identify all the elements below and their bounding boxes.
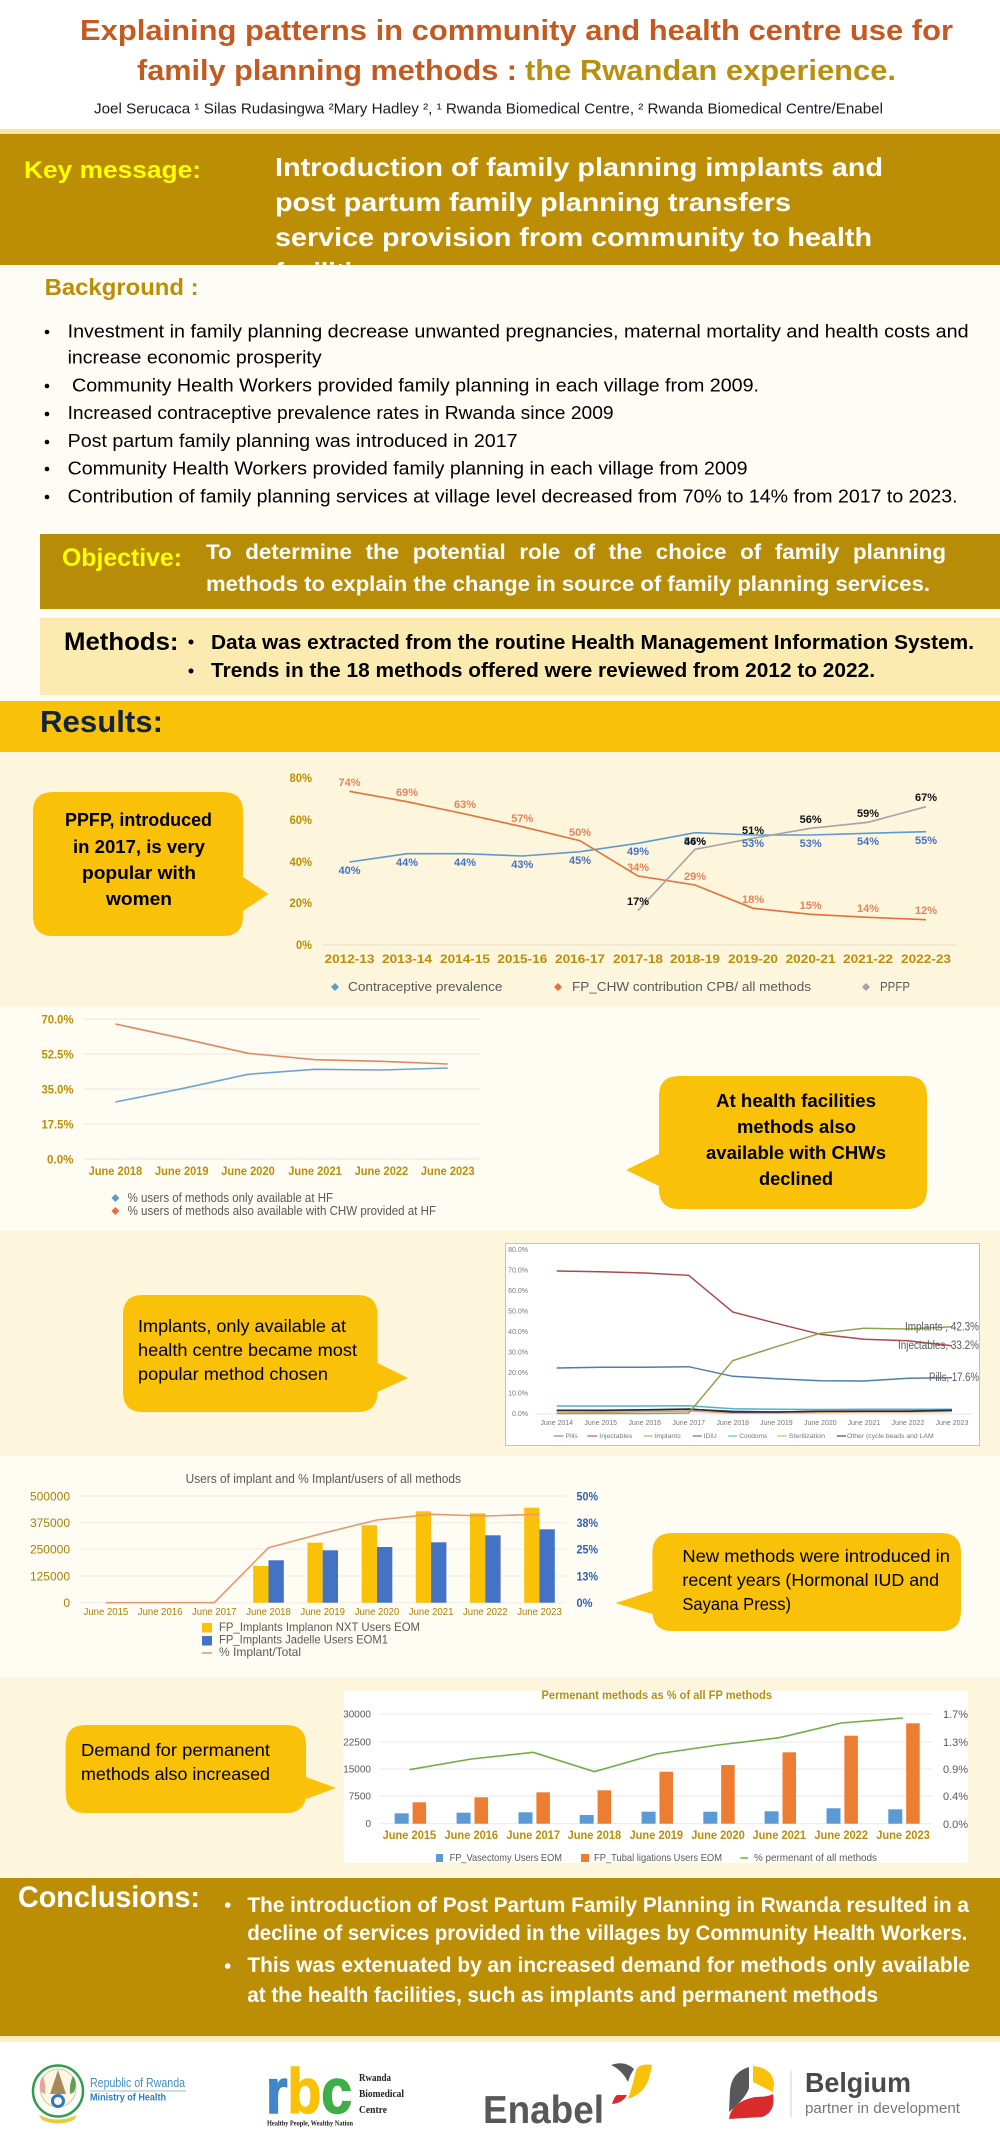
chart legend: % Implant/Total [219, 1645, 301, 1659]
line chart: contraceptive prevalence, CHW contribution and PPFP: 20% [290, 896, 312, 910]
combo chart: users of implants: Users of implant and % Implant/users of all methods [186, 1471, 461, 1486]
background bullet list: Post partum family planning was introduced in 2017 [68, 430, 518, 451]
callout: permanent methods: Demand for permanent [81, 1740, 270, 1760]
methods bullet list [188, 631, 974, 682]
line chart: method mix: 10.0% [508, 1390, 528, 1398]
chart legend: Contraceptive prevalence [348, 979, 502, 994]
line chart: method mix: June 2019 [760, 1420, 793, 1427]
logo: Belgium partner in development: Belgium [805, 2067, 911, 2098]
background bullet list: Increased contraceptive prevalence rates in Rwanda since 2009 [68, 402, 614, 423]
logo: Rwanda Biomedical Centre: Rwanda [359, 2073, 392, 2084]
line chart: contraceptive prevalence, CHW contribution and PPFP: 53% [800, 838, 822, 850]
background bullet list [45, 320, 969, 506]
combo chart: users of implants: 125000 [30, 1570, 70, 1584]
callout: new methods: New methods were introduced in [682, 1546, 950, 1566]
combo chart: permanent methods: Permenant methods as % of all FP methods [542, 1690, 772, 1702]
callout: PPFP popular [33, 792, 268, 936]
chart legend: Injectables [599, 1433, 633, 1440]
line chart: users of methods at health facilities: June 2020 [221, 1164, 275, 1178]
line chart: contraceptive prevalence, CHW contribution and PPFP [290, 771, 957, 994]
logo: Rwanda Biomedical Centre: rbc [266, 2057, 352, 2127]
background bullet list: Investment in family planning decrease unwanted pregnancies, maternal mortality and health costs and [68, 320, 969, 342]
line chart: contraceptive prevalence, CHW contribution and PPFP: 67% [915, 792, 937, 804]
line chart: users of methods at health facilities [42, 1012, 480, 1218]
chart legend: PPFP [880, 979, 910, 994]
line chart: method mix: 80.0% [508, 1247, 528, 1254]
combo chart: users of implants: June 2018 [246, 1606, 291, 1618]
line chart: contraceptive prevalence, CHW contribution and PPFP: 44% [454, 857, 476, 869]
line chart: contraceptive prevalence, CHW contribution and PPFP: 51% [742, 825, 764, 837]
combo chart: permanent methods: 0.9% [943, 1764, 968, 1776]
callout: implants popular: Implants, only available at [138, 1316, 346, 1336]
line chart: contraceptive prevalence, CHW contribution and PPFP: 34% [627, 862, 649, 874]
combo chart: users of implants: 500000 [30, 1490, 70, 1504]
line chart: contraceptive prevalence, CHW contribution and PPFP: 2012-13 [324, 952, 375, 966]
combo chart: users of implants: 38% [576, 1518, 598, 1530]
objective text [206, 541, 946, 596]
line chart: method mix [506, 1244, 980, 1446]
combo chart: permanent methods: 30000 [343, 1710, 371, 1720]
line chart: users of methods at health facilities: June 2022 [355, 1164, 408, 1178]
combo chart: permanent methods: 0.0% [943, 1819, 968, 1831]
background bullet list: Community Health Workers provided family planning in each village from 2009. [72, 374, 759, 395]
chart legend: % permenant of all methods [754, 1852, 877, 1864]
line chart: users of methods at health facilities: June 2019 [155, 1164, 209, 1178]
combo chart: users of implants: June 2020 [355, 1606, 399, 1618]
line chart: users of methods at health facilities: June 2021 [288, 1164, 342, 1178]
line chart: contraceptive prevalence, CHW contribution and PPFP: 63% [454, 799, 476, 811]
panel: methods [40, 618, 1000, 695]
chart legend [111, 1191, 436, 1218]
line chart: method mix: Implants , 42.3% [905, 1322, 979, 1334]
key message text: post partum family planning transfers [275, 187, 791, 217]
line chart: contraceptive prevalence, CHW contribution and PPFP: 54% [857, 836, 879, 848]
methods bullet list: Trends in the 18 methods offered were reviewed from 2012 to 2022. [211, 659, 875, 682]
callout: implants popular [123, 1295, 408, 1412]
title: Explaining patterns in community and health centre use for [80, 15, 953, 47]
logo: Republic of Rwanda Ministry of Health [33, 2066, 186, 2124]
objective text: methods to explain the change in source of family planning services. [206, 573, 930, 596]
callout: implants popular: popular method chosen [138, 1364, 328, 1384]
combo chart: permanent methods: June 2020 [691, 1828, 745, 1842]
combo chart: users of implants: 250000 [30, 1542, 70, 1556]
combo chart: permanent methods [343, 1690, 968, 1864]
callout: PPFP popular: women [105, 889, 172, 909]
chart legend: IDIU [704, 1433, 717, 1440]
chart legend [202, 1620, 420, 1659]
line chart: method mix: June 2015 [584, 1420, 617, 1427]
combo chart: permanent methods: June 2023 [876, 1828, 930, 1842]
chart legend: Other (cycle beads and LAM [847, 1433, 934, 1440]
callout: PPFP popular: PPFP, introduced [65, 810, 212, 830]
line chart: contraceptive prevalence, CHW contribution and PPFP: 80% [290, 771, 312, 785]
combo chart: permanent methods: 7500 [349, 1792, 371, 1802]
line chart: method mix: 20.0% [508, 1370, 528, 1377]
line chart: users of methods at health facilities: 52.5% [42, 1048, 74, 1062]
logo: Enabel [483, 2063, 652, 2132]
panel: health facility methods [0, 1007, 1000, 1231]
conclusions bullet list: The introduction of Post Partum Family Planning in Rwanda resulted in a [247, 1894, 969, 1917]
callout: new methods [615, 1533, 961, 1631]
combo chart: users of implants: 25% [576, 1544, 598, 1556]
panel: objective [40, 534, 1000, 609]
line chart: contraceptive prevalence, CHW contribution and PPFP: 18% [742, 894, 764, 906]
results heading band [0, 701, 1000, 752]
line chart: contraceptive prevalence, CHW contribution and PPFP: 2017-18 [613, 952, 663, 966]
chart legend: % users of methods only available at HF [128, 1191, 333, 1205]
line chart: method mix: 30.0% [508, 1350, 528, 1356]
line chart: users of methods at health facilities: 17.5% [42, 1118, 74, 1132]
line chart: contraceptive prevalence, CHW contribution and PPFP: 2019-20 [728, 952, 778, 966]
line chart: method mix: June 2023 [936, 1420, 968, 1427]
key message label: Key message: [24, 157, 201, 184]
objective label: Objective: [62, 544, 182, 572]
panel: new methods [0, 1456, 1000, 1677]
combo chart: permanent methods: 15000 [343, 1764, 371, 1776]
line chart: method mix: June 2022 [892, 1420, 924, 1427]
chart legend: Condoms [739, 1433, 768, 1440]
line chart: contraceptive prevalence, CHW contribution and PPFP: 53% [742, 838, 764, 850]
line chart: method mix: June 2020 [804, 1420, 837, 1427]
combo chart: users of implants: 0 [63, 1596, 70, 1610]
line chart: method mix: Pills, 17.6% [929, 1372, 979, 1384]
combo chart: permanent methods: June 2017 [506, 1828, 560, 1842]
logo: Belgium partner in development: partner in development [805, 2100, 961, 2117]
methods label: Methods: [64, 628, 178, 656]
chart legend: FP_Tubal ligations Users EOM [594, 1852, 722, 1864]
background bullet list: Community Health Workers provided family planning in each village from 2009 [68, 458, 748, 479]
combo chart: users of implants: June 2022 [463, 1606, 508, 1618]
line chart: contraceptive prevalence, CHW contribution and PPFP: 2021-22 [843, 952, 893, 966]
callout: methods declined: available with CHWs [706, 1143, 886, 1163]
line chart: contraceptive prevalence, CHW contribution and PPFP: 0% [296, 938, 312, 952]
line chart: method mix: 0.0% [512, 1411, 528, 1418]
combo chart: permanent methods: June 2018 [568, 1828, 621, 1842]
line chart: method mix: June 2018 [716, 1420, 749, 1427]
combo chart: permanent methods: June 2021 [752, 1828, 806, 1842]
conclusions bullet list: at the health facilities, such as implants and permanent methods [247, 1984, 878, 2007]
line chart: method mix: 50.0% [508, 1308, 528, 1316]
line chart: contraceptive prevalence, CHW contribution and PPFP: 59% [857, 808, 879, 820]
line chart: users of methods at health facilities: 0.0% [47, 1152, 74, 1166]
panel: conclusions [0, 1878, 1000, 2042]
line chart: method mix: June 2021 [848, 1420, 880, 1427]
combo chart: permanent methods: June 2016 [444, 1828, 498, 1842]
conclusions bullet list: This was extenuated by an increased demand for methods only available [247, 1954, 970, 1977]
combo chart: permanent methods: 0 [365, 1819, 371, 1830]
line chart: method mix: June 2014 [540, 1420, 573, 1427]
background heading: Background : [45, 274, 199, 300]
line chart: contraceptive prevalence, CHW contribution and PPFP: 69% [396, 787, 418, 799]
line chart: contraceptive prevalence, CHW contribution and PPFP: 2015-16 [497, 952, 548, 966]
key message text: service provision from community to health [275, 222, 872, 252]
line chart: contraceptive prevalence, CHW contribution and PPFP: 56% [800, 814, 822, 826]
line chart: contraceptive prevalence, CHW contribution and PPFP: 50% [569, 827, 591, 839]
combo chart: users of implants: 13% [576, 1572, 598, 1584]
panel: background [0, 265, 1000, 701]
conclusions heading: Conclusions: [18, 1881, 200, 1914]
authors: Joel Serucaca ¹ Silas Rudasingwa ²Mary Hadley ², ¹ Rwanda Biomedical Centre, ² Rwanda Biomedical Centre/Enabel [94, 102, 883, 118]
key message text: facilities. [275, 257, 389, 287]
line chart: contraceptive prevalence, CHW contribution and PPFP: 29% [684, 871, 706, 883]
chart legend: FP_Implants Implanon NXT Users EOM [219, 1620, 420, 1634]
chart legend: FP_Implants Jadelle Users EOM1 [219, 1632, 388, 1646]
callout: PPFP popular: popular with [82, 863, 196, 883]
panel: implants [0, 1231, 1000, 1456]
panel: PPFP result [0, 752, 1000, 1007]
line chart: users of methods at health facilities: 35.0% [42, 1082, 74, 1096]
logo: Rwanda Biomedical Centre: Healthy People, Wealthy Nation [267, 2120, 353, 2128]
line chart: contraceptive prevalence, CHW contribution and PPFP: 2020-21 [786, 952, 836, 966]
callout: permanent methods [66, 1725, 336, 1813]
combo chart: permanent methods: 1.3% [943, 1737, 968, 1749]
combo chart: users of implants: June 2015 [84, 1606, 128, 1618]
combo chart: users of implants: June 2019 [300, 1606, 345, 1618]
logo: Enabel: Enabel [483, 2089, 604, 2132]
combo chart: users of implants: 50% [576, 1492, 598, 1504]
chart legend: FP_CHW contribution CPB/ all methods [572, 979, 812, 994]
callout: PPFP popular: in 2017, is very [73, 837, 205, 857]
background bullet list: increase economic prosperity [68, 347, 322, 368]
line chart: method mix: 60.0% [508, 1288, 528, 1295]
line chart: contraceptive prevalence, CHW contribution and PPFP: 49% [627, 846, 649, 858]
conclusions bullet list [225, 1894, 970, 2007]
line chart: contraceptive prevalence, CHW contribution and PPFP: 12% [915, 905, 937, 917]
line chart: contraceptive prevalence, CHW contribution and PPFP: 60% [290, 813, 312, 827]
callout: methods declined: At health facilities [716, 1091, 876, 1111]
line chart: contraceptive prevalence, CHW contribution and PPFP: 17% [627, 896, 649, 908]
line chart: contraceptive prevalence, CHW contribution and PPFP: 45% [569, 855, 591, 867]
line chart: contraceptive prevalence, CHW contribution and PPFP: 43% [511, 859, 534, 871]
key message text: Introduction of family planning implants and [275, 152, 883, 182]
combo chart: users of implants: June 2017 [192, 1606, 237, 1618]
line chart: contraceptive prevalence, CHW contribution and PPFP: 57% [511, 813, 534, 825]
chart legend: Sterilization [789, 1433, 825, 1440]
line chart: contraceptive prevalence, CHW contribution and PPFP: 46% [684, 836, 706, 848]
combo chart: permanent methods: June 2022 [814, 1828, 868, 1842]
callout: new methods: Sayana Press) [682, 1594, 791, 1614]
title [80, 15, 953, 87]
line chart: contraceptive prevalence, CHW contribution and PPFP: 74% [338, 777, 361, 789]
callout: new methods: recent years (Hormonal IUD and [682, 1570, 939, 1590]
background bullet list: Contribution of family planning services at village level decreased from 70% to 14% from 2017 to 2023. [68, 486, 958, 506]
callout: methods declined: methods also [737, 1117, 856, 1137]
line chart: contraceptive prevalence, CHW contribution and PPFP: 2016-17 [555, 952, 605, 966]
combo chart: permanent methods: 1.7% [943, 1709, 968, 1721]
line chart: contraceptive prevalence, CHW contribution and PPFP: 54% [684, 836, 706, 848]
line chart: method mix: 70.0% [508, 1268, 528, 1274]
logo: Rwanda Biomedical Centre [266, 2057, 404, 2128]
chart legend: FP_Vasectomy Users EOM [450, 1852, 562, 1864]
combo chart: users of implants: June 2021 [409, 1606, 454, 1618]
chart legend [554, 1433, 934, 1440]
logo: Belgium partner in development [729, 2066, 961, 2119]
panel: key message [0, 129, 1000, 287]
methods bullet list: Data was extracted from the routine Health Management Information System. [211, 631, 974, 654]
line chart: users of methods at health facilities: June 2018 [89, 1164, 142, 1178]
line chart: contraceptive prevalence, CHW contribution and PPFP: 2014-15 [440, 952, 490, 966]
line chart: contraceptive prevalence, CHW contribution and PPFP: 15% [800, 900, 822, 912]
chart legend [331, 979, 910, 994]
callout: methods declined [626, 1076, 927, 1209]
panel: permanent methods [0, 1677, 1000, 1878]
combo chart: permanent methods: 22500 [343, 1738, 371, 1748]
results heading band: Results: [40, 704, 163, 739]
title: family planning methods : [137, 55, 517, 87]
chart legend: Implants [654, 1433, 681, 1440]
combo chart: users of implants: June 2023 [517, 1606, 562, 1618]
combo chart: permanent methods: June 2015 [383, 1828, 436, 1842]
combo chart: users of implants: 0% [576, 1598, 592, 1610]
chart legend [436, 1852, 877, 1864]
line chart: contraceptive prevalence, CHW contribution and PPFP: 40% [338, 865, 361, 877]
title: the Rwandan experience. [525, 55, 896, 87]
chart legend: % users of methods also available with CHW provided at HF [128, 1204, 436, 1218]
combo chart: permanent methods: June 2019 [630, 1828, 683, 1842]
line chart: contraceptive prevalence, CHW contribution and PPFP: 55% [915, 835, 937, 847]
key message text [275, 152, 883, 287]
callout: permanent methods: methods also increased [81, 1764, 270, 1784]
combo chart: permanent methods: 0.4% [943, 1791, 968, 1803]
line chart: method mix: June 2017 [672, 1420, 705, 1427]
logo: Rwanda Biomedical Centre: Biomedical [359, 2089, 404, 2100]
line chart: contraceptive prevalence, CHW contribution and PPFP: 14% [857, 903, 879, 915]
line chart: contraceptive prevalence, CHW contribution and PPFP: 2013-14 [382, 952, 432, 966]
line chart: users of methods at health facilities: June 2023 [421, 1164, 475, 1178]
conclusions bullet list: decline of services provided in the villages by Community Health Workers. [247, 1922, 967, 1945]
line chart: method mix: 40.0% [508, 1329, 528, 1336]
combo chart: users of implants: 375000 [30, 1516, 70, 1530]
logo: Republic of Rwanda Ministry of Health: Ministry of Health [90, 2092, 166, 2104]
logo: Republic of Rwanda Ministry of Health: Republic of Rwanda [90, 2076, 185, 2090]
callout: implants popular: health centre became most [138, 1340, 357, 1360]
chart legend: Pills [566, 1433, 578, 1440]
line chart: method mix: June 2016 [628, 1420, 661, 1427]
line chart: users of methods at health facilities: 70.0% [42, 1012, 74, 1026]
combo chart: users of implants: June 2016 [138, 1606, 183, 1618]
combo chart: users of implants [30, 1471, 598, 1659]
line chart: contraceptive prevalence, CHW contribution and PPFP: 40% [290, 855, 312, 869]
objective text: To determine the potential role of the choice of family planning [206, 541, 946, 564]
callout: methods declined: declined [759, 1169, 833, 1189]
line chart: contraceptive prevalence, CHW contribution and PPFP: 2018-19 [670, 952, 720, 966]
line chart: method mix: Injectables, 33.2% [898, 1340, 979, 1352]
logo: Rwanda Biomedical Centre: Centre [359, 2105, 387, 2116]
line chart: contraceptive prevalence, CHW contribution and PPFP: 44% [396, 857, 418, 869]
line chart: contraceptive prevalence, CHW contribution and PPFP: 2022-23 [901, 952, 951, 966]
